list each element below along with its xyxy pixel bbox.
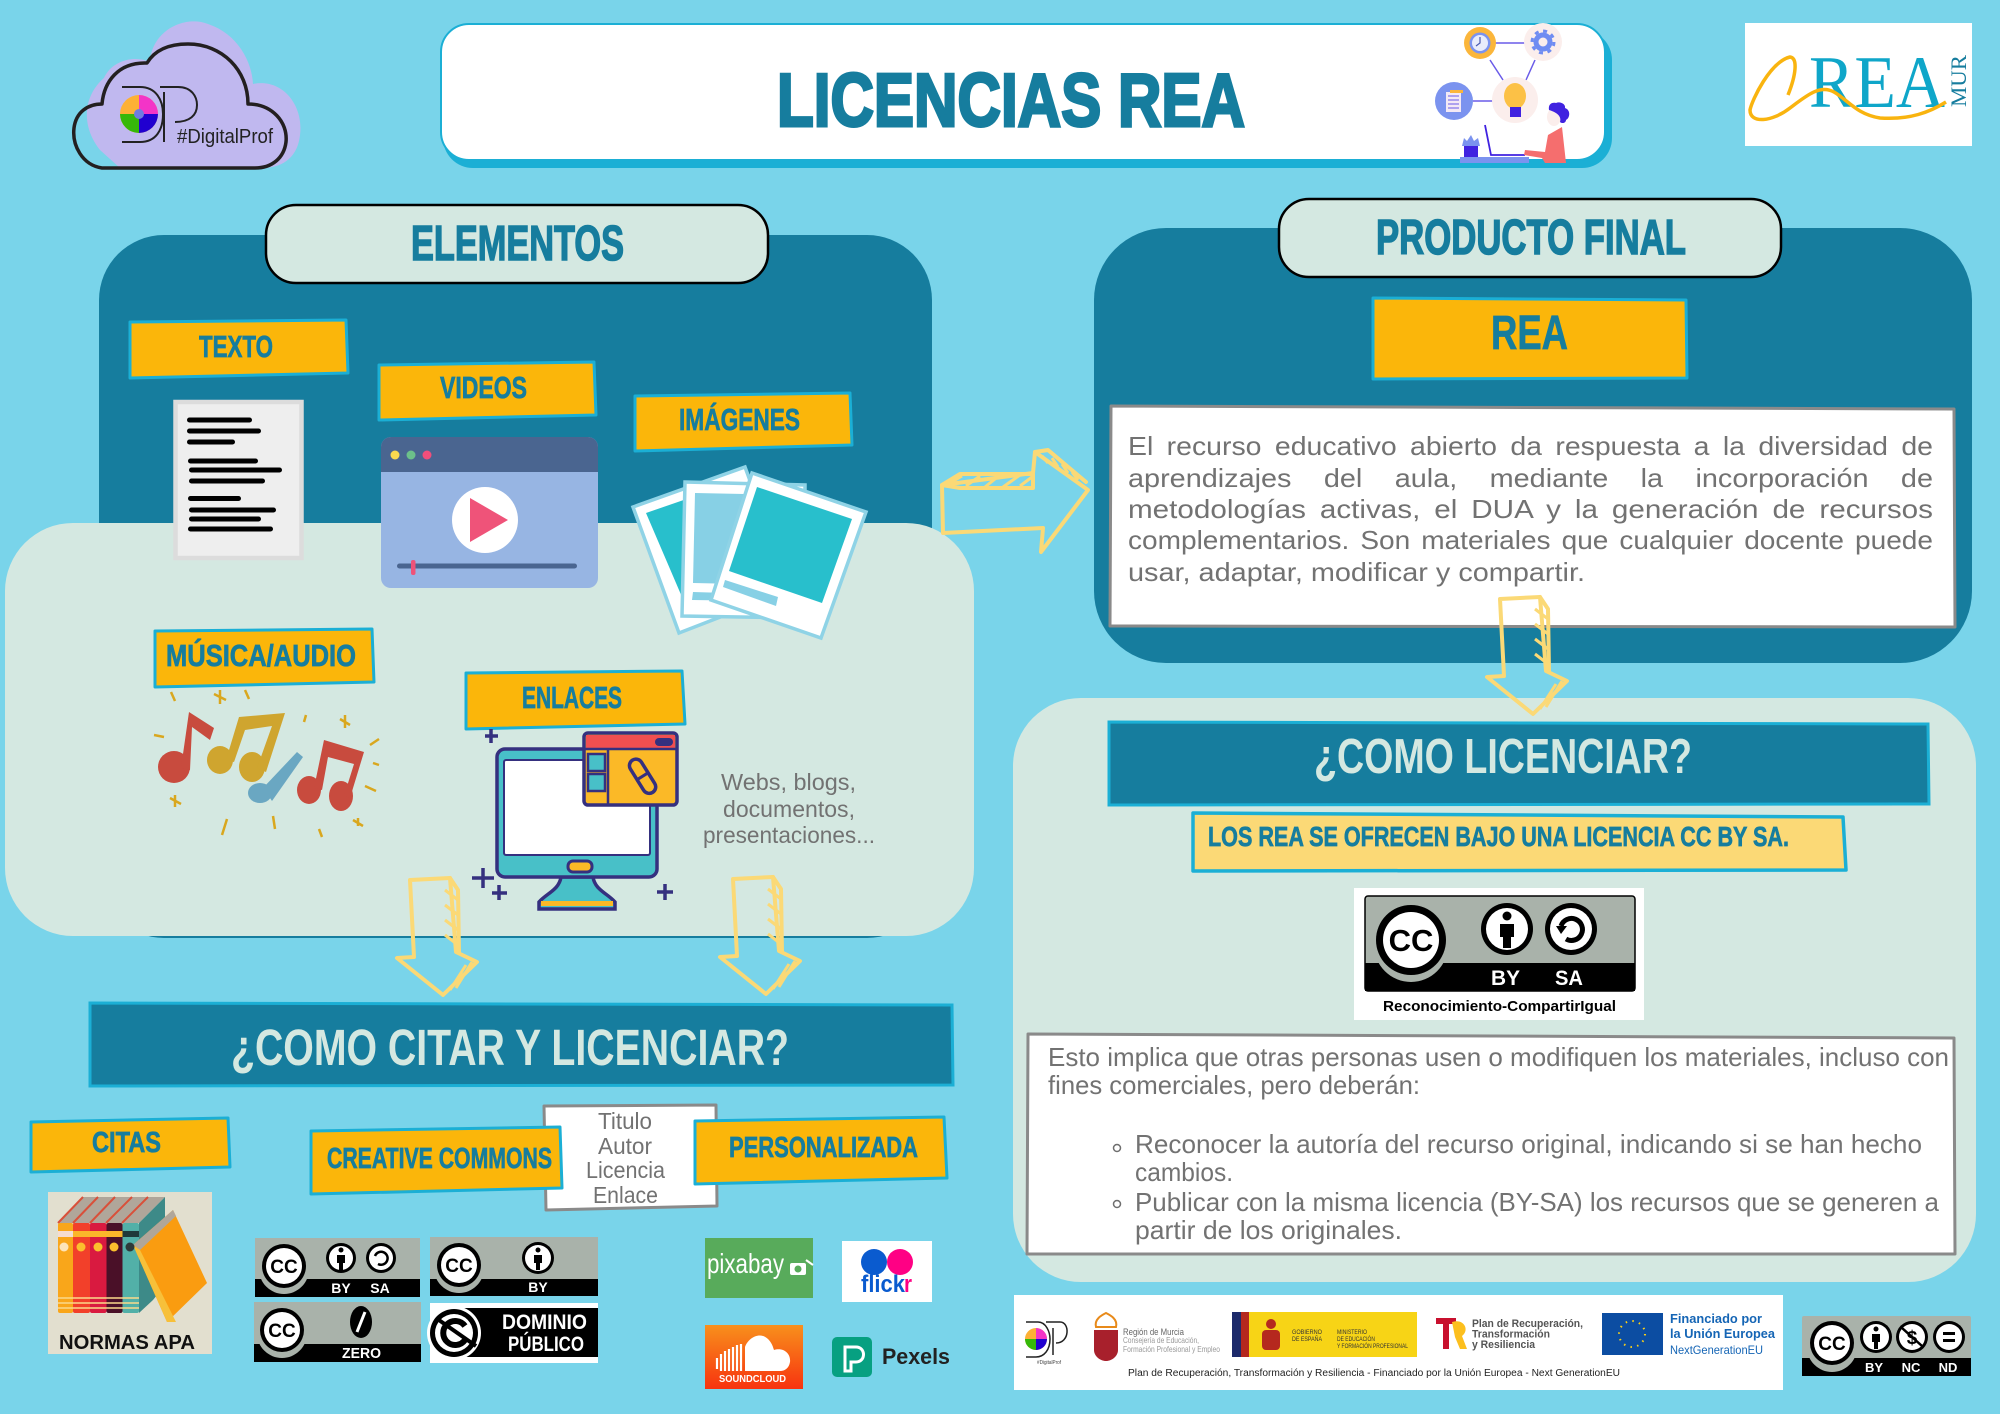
icon: stacked photos (633, 467, 866, 638)
heading banner: como licenciar: ¿COMO LICENCIAR? (1314, 730, 1692, 784)
arrow: down to como licenciar (1487, 597, 1567, 714)
badge: cc by nc nd: CC (1818, 1334, 1846, 1355)
badge: cc by small: CC (445, 1256, 473, 1277)
heading: elementos: ELEMENTOS (411, 217, 624, 271)
label: musica/audio: MÚSICA/AUDIO (166, 637, 356, 673)
label: rea (1373, 298, 1687, 379)
label: musica/audio (155, 629, 374, 687)
logo: region de murcia: Región de Murcia (1123, 1327, 1185, 1338)
text: webs, blogs: Webs, blogs, (721, 769, 856, 795)
icon: text document (176, 402, 302, 558)
logo: region de murcia: Consejería de Educación, (1123, 1335, 1199, 1345)
logo: flickr (842, 1241, 932, 1302)
logo: pexels: Pexels (882, 1344, 950, 1369)
badge: cc by sa large: Reconocimiento-CompartirIgual (1383, 998, 1616, 1015)
logo: CREA MUR: REA (1809, 42, 1945, 124)
text: webs, blogs (703, 769, 875, 848)
logo: union europea: la Unión Europea (1670, 1326, 1776, 1341)
illustration: ideas network with person at laptop (1435, 23, 1569, 163)
text card: titulo autor licencia enlace: Enlace (593, 1182, 658, 1208)
badge: cc by nc nd: ND (1939, 1360, 1957, 1375)
text box: definition of rea: metodologías activas, el DUA y la generación de recursos (1128, 494, 1933, 524)
panel: producto final (dark) (1094, 228, 1972, 663)
text box: definition of rea (1110, 406, 1955, 627)
logo: flickr: r (904, 1271, 912, 1298)
text box: license explanation: fines comerciales, pero deberán: (1048, 1070, 1420, 1100)
badge: dominio publico (427, 1303, 598, 1363)
text box: license explanation: Publicar con la misma licencia (BY-SA) los recursos que se generen a (1135, 1187, 1940, 1217)
label: personalizada: PERSONALIZADA (729, 1132, 918, 1164)
callout: licencia cc by sa: LOS REA SE OFRECEN BAJO UNA LICENCIA CC BY SA. (1208, 821, 1789, 852)
text card: titulo autor licencia enlace: Titulo (598, 1108, 652, 1134)
badge: cc by nc nd (1802, 1316, 1971, 1376)
label: texto: TEXTO (199, 329, 273, 364)
logo: digitalprof mini: #DigitalProf (1037, 1360, 1062, 1366)
logo: CREA MUR (1745, 23, 1972, 146)
logo: digitalprof mini (1025, 1322, 1067, 1366)
badge: cc by sa large: BY (1491, 967, 1520, 990)
text box: license explanation: cambios. (1135, 1157, 1233, 1187)
label: enlaces (466, 671, 685, 729)
panel: elementos (light lower) (5, 523, 974, 936)
text box: definition of rea: aprendizajes del aula, mediante la incorporación de (1128, 463, 1933, 493)
label: texto (130, 320, 348, 378)
label: videos: VIDEOS (440, 370, 527, 405)
callout: licencia cc by sa (1193, 813, 1846, 871)
label: personalizada (695, 1117, 947, 1184)
image: normas apa books: NORMAS APA (59, 1332, 195, 1354)
panel: como licenciar (light) (1013, 698, 1976, 1282)
heading banner: como citar y licenciar: ¿COMO CITAR Y LICENCIAR? (231, 1019, 789, 1076)
badge: cc by sa large (1354, 888, 1644, 1020)
logo: union europea (1602, 1311, 1776, 1357)
logo: pixabay: pixabay (707, 1248, 784, 1279)
badge: cc by sa small (255, 1238, 420, 1297)
heading banner: como licenciar (1109, 722, 1929, 805)
icon: music notes (154, 690, 379, 837)
logo: region de murcia: Formación Profesional y Empleo (1123, 1344, 1220, 1354)
logo: gobierno de espana (1232, 1312, 1417, 1357)
badge: cc by nc nd: $ (1907, 1328, 1918, 1349)
text box: license explanation: Reconocer la autoría del recurso original, indicando si se han hecho (1135, 1129, 1922, 1159)
text card: titulo autor licencia enlace (544, 1105, 717, 1210)
arrow: to producto final (942, 450, 1088, 552)
badge: cc by sa small: SA (370, 1280, 390, 1296)
logo: gobierno de espana: DE EDUCACIÓN (1337, 1336, 1375, 1343)
logo: pixabay (705, 1238, 813, 1298)
badge: cc by sa large: CC (1389, 923, 1433, 958)
badge: cc zero (254, 1302, 421, 1362)
badge: cc zero: ZERO (342, 1345, 381, 1362)
badge: cc by sa small: CC (270, 1257, 298, 1278)
logo: flickr: flick (861, 1271, 906, 1298)
badge: dominio publico: PÚBLICO (508, 1332, 584, 1356)
logo: plan de recuperacion: y Resiliencia (1472, 1339, 1536, 1351)
logo: pexels (832, 1337, 950, 1377)
logo: gobierno de espana: DE ESPAÑA (1292, 1336, 1322, 1343)
text box: definition of rea: complementarios. Son materiales que cualquier docente puede (1128, 525, 1933, 555)
heading: producto final (1279, 199, 1781, 277)
title banner (441, 24, 1612, 168)
text box: definition of rea: usar, adaptar, modificar y compartir. (1128, 557, 1585, 587)
logo: DigitalProf cloud: #DigitalProf (177, 126, 273, 148)
text box: license explanation: Esto implica que otras personas usen o modifiquen los materiales, incluso con (1048, 1042, 1949, 1072)
text: webs, blogs: presentaciones... (703, 822, 875, 848)
logo: CREA MUR: MUR (1946, 55, 1971, 107)
label: citas (31, 1118, 230, 1172)
logo: plan de recuperacion: Transformación (1472, 1328, 1550, 1340)
badge: dominio publico: DOMINIO (502, 1311, 587, 1334)
image: normas apa books (48, 1192, 212, 1354)
logo: plan de recuperacion: Plan de Recuperación, (1472, 1318, 1583, 1330)
title: LICENCIAS REA (777, 58, 1245, 142)
label: creative commons (311, 1127, 562, 1194)
icon: video player (381, 437, 598, 588)
label: imagenes (635, 393, 852, 451)
arrow: down left (397, 878, 477, 995)
logo: soundcloud (705, 1325, 803, 1389)
logo: DigitalProf cloud (74, 21, 300, 168)
footer text: Plan de Recuperación, Transformación y Resiliencia - Financiado por la Unión Europea - Next GenerationEU (1128, 1368, 1620, 1379)
logo: region de murcia (1094, 1313, 1220, 1361)
bullet: publicar misma licencia (1114, 1200, 1120, 1208)
text card: titulo autor licencia enlace: Licencia (586, 1157, 665, 1183)
badge: cc by small: BY (528, 1279, 548, 1295)
badge: cc by nc nd: NC (1902, 1360, 1921, 1375)
logo: plan de recuperacion (1436, 1318, 1583, 1351)
heading banner: como citar y licenciar (90, 1003, 953, 1086)
label: imagenes: IMÁGENES (679, 402, 800, 437)
badge: cc by nc nd: BY (1865, 1360, 1883, 1375)
heading: producto final: PRODUCTO FINAL (1376, 211, 1686, 265)
label: creative commons: CREATIVE COMMONS (327, 1143, 552, 1175)
footer: funding logos strip (1014, 1295, 1783, 1390)
bullet: reconocer autoria (1114, 1144, 1120, 1152)
icon: monitor with link window (472, 729, 677, 909)
label: rea: REA (1491, 307, 1568, 360)
text box: license explanation (1027, 1034, 1955, 1254)
logo: gobierno de espana: GOBIERNO (1292, 1330, 1322, 1336)
text box: definition of rea: El recurso educativo abierto da respuesta a la diversidad de (1128, 431, 1933, 461)
logo: union europea: NextGenerationEU (1670, 1343, 1763, 1357)
badge: cc zero: CC (268, 1321, 296, 1342)
badge: cc by sa small: BY (331, 1280, 351, 1296)
text card: titulo autor licencia enlace: Autor (598, 1133, 652, 1159)
badge: cc by small (430, 1237, 598, 1296)
logo: soundcloud: SOUNDCLOUD (719, 1374, 786, 1385)
label: videos (379, 362, 596, 420)
logo: gobierno de espana: MINISTERIO (1337, 1330, 1367, 1336)
badge: cc by sa large: SA (1555, 967, 1583, 990)
logo: gobierno de espana: Y FORMACIÓN PROFESIONAL (1337, 1343, 1409, 1350)
panel: elementos (dark) (99, 235, 932, 938)
label: citas: CITAS (92, 1127, 161, 1159)
arrow: down right (720, 877, 800, 994)
text box: license explanation: partir de los originales. (1135, 1215, 1402, 1245)
heading: elementos (266, 205, 768, 283)
logo: union europea: Financiado por (1670, 1311, 1762, 1326)
label: enlaces: ENLACES (522, 680, 622, 715)
text: webs, blogs: documentos, (723, 796, 855, 822)
